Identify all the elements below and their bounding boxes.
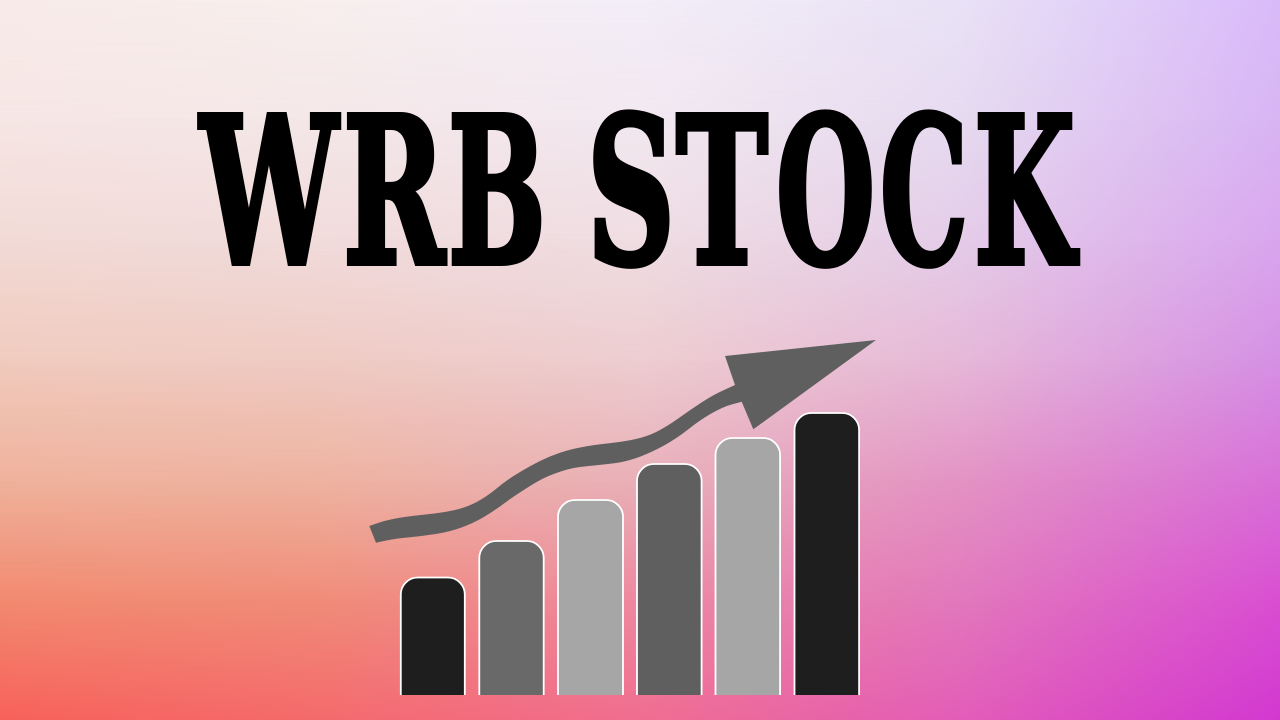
title: S <box>587 72 675 311</box>
title: R <box>343 72 446 311</box>
title: C <box>880 72 968 311</box>
bar 5 <box>716 438 780 695</box>
bar 2 <box>479 541 544 695</box>
title: W <box>199 72 340 311</box>
title: O <box>776 72 875 311</box>
arrow <box>369 340 876 543</box>
bar 3 <box>558 500 623 695</box>
title: K <box>974 72 1079 311</box>
bar chart <box>401 413 859 695</box>
bar 6 <box>794 413 859 695</box>
title: B <box>448 72 546 311</box>
bar 1 <box>401 578 465 695</box>
bar 4 <box>637 464 702 695</box>
title: T <box>676 72 768 311</box>
